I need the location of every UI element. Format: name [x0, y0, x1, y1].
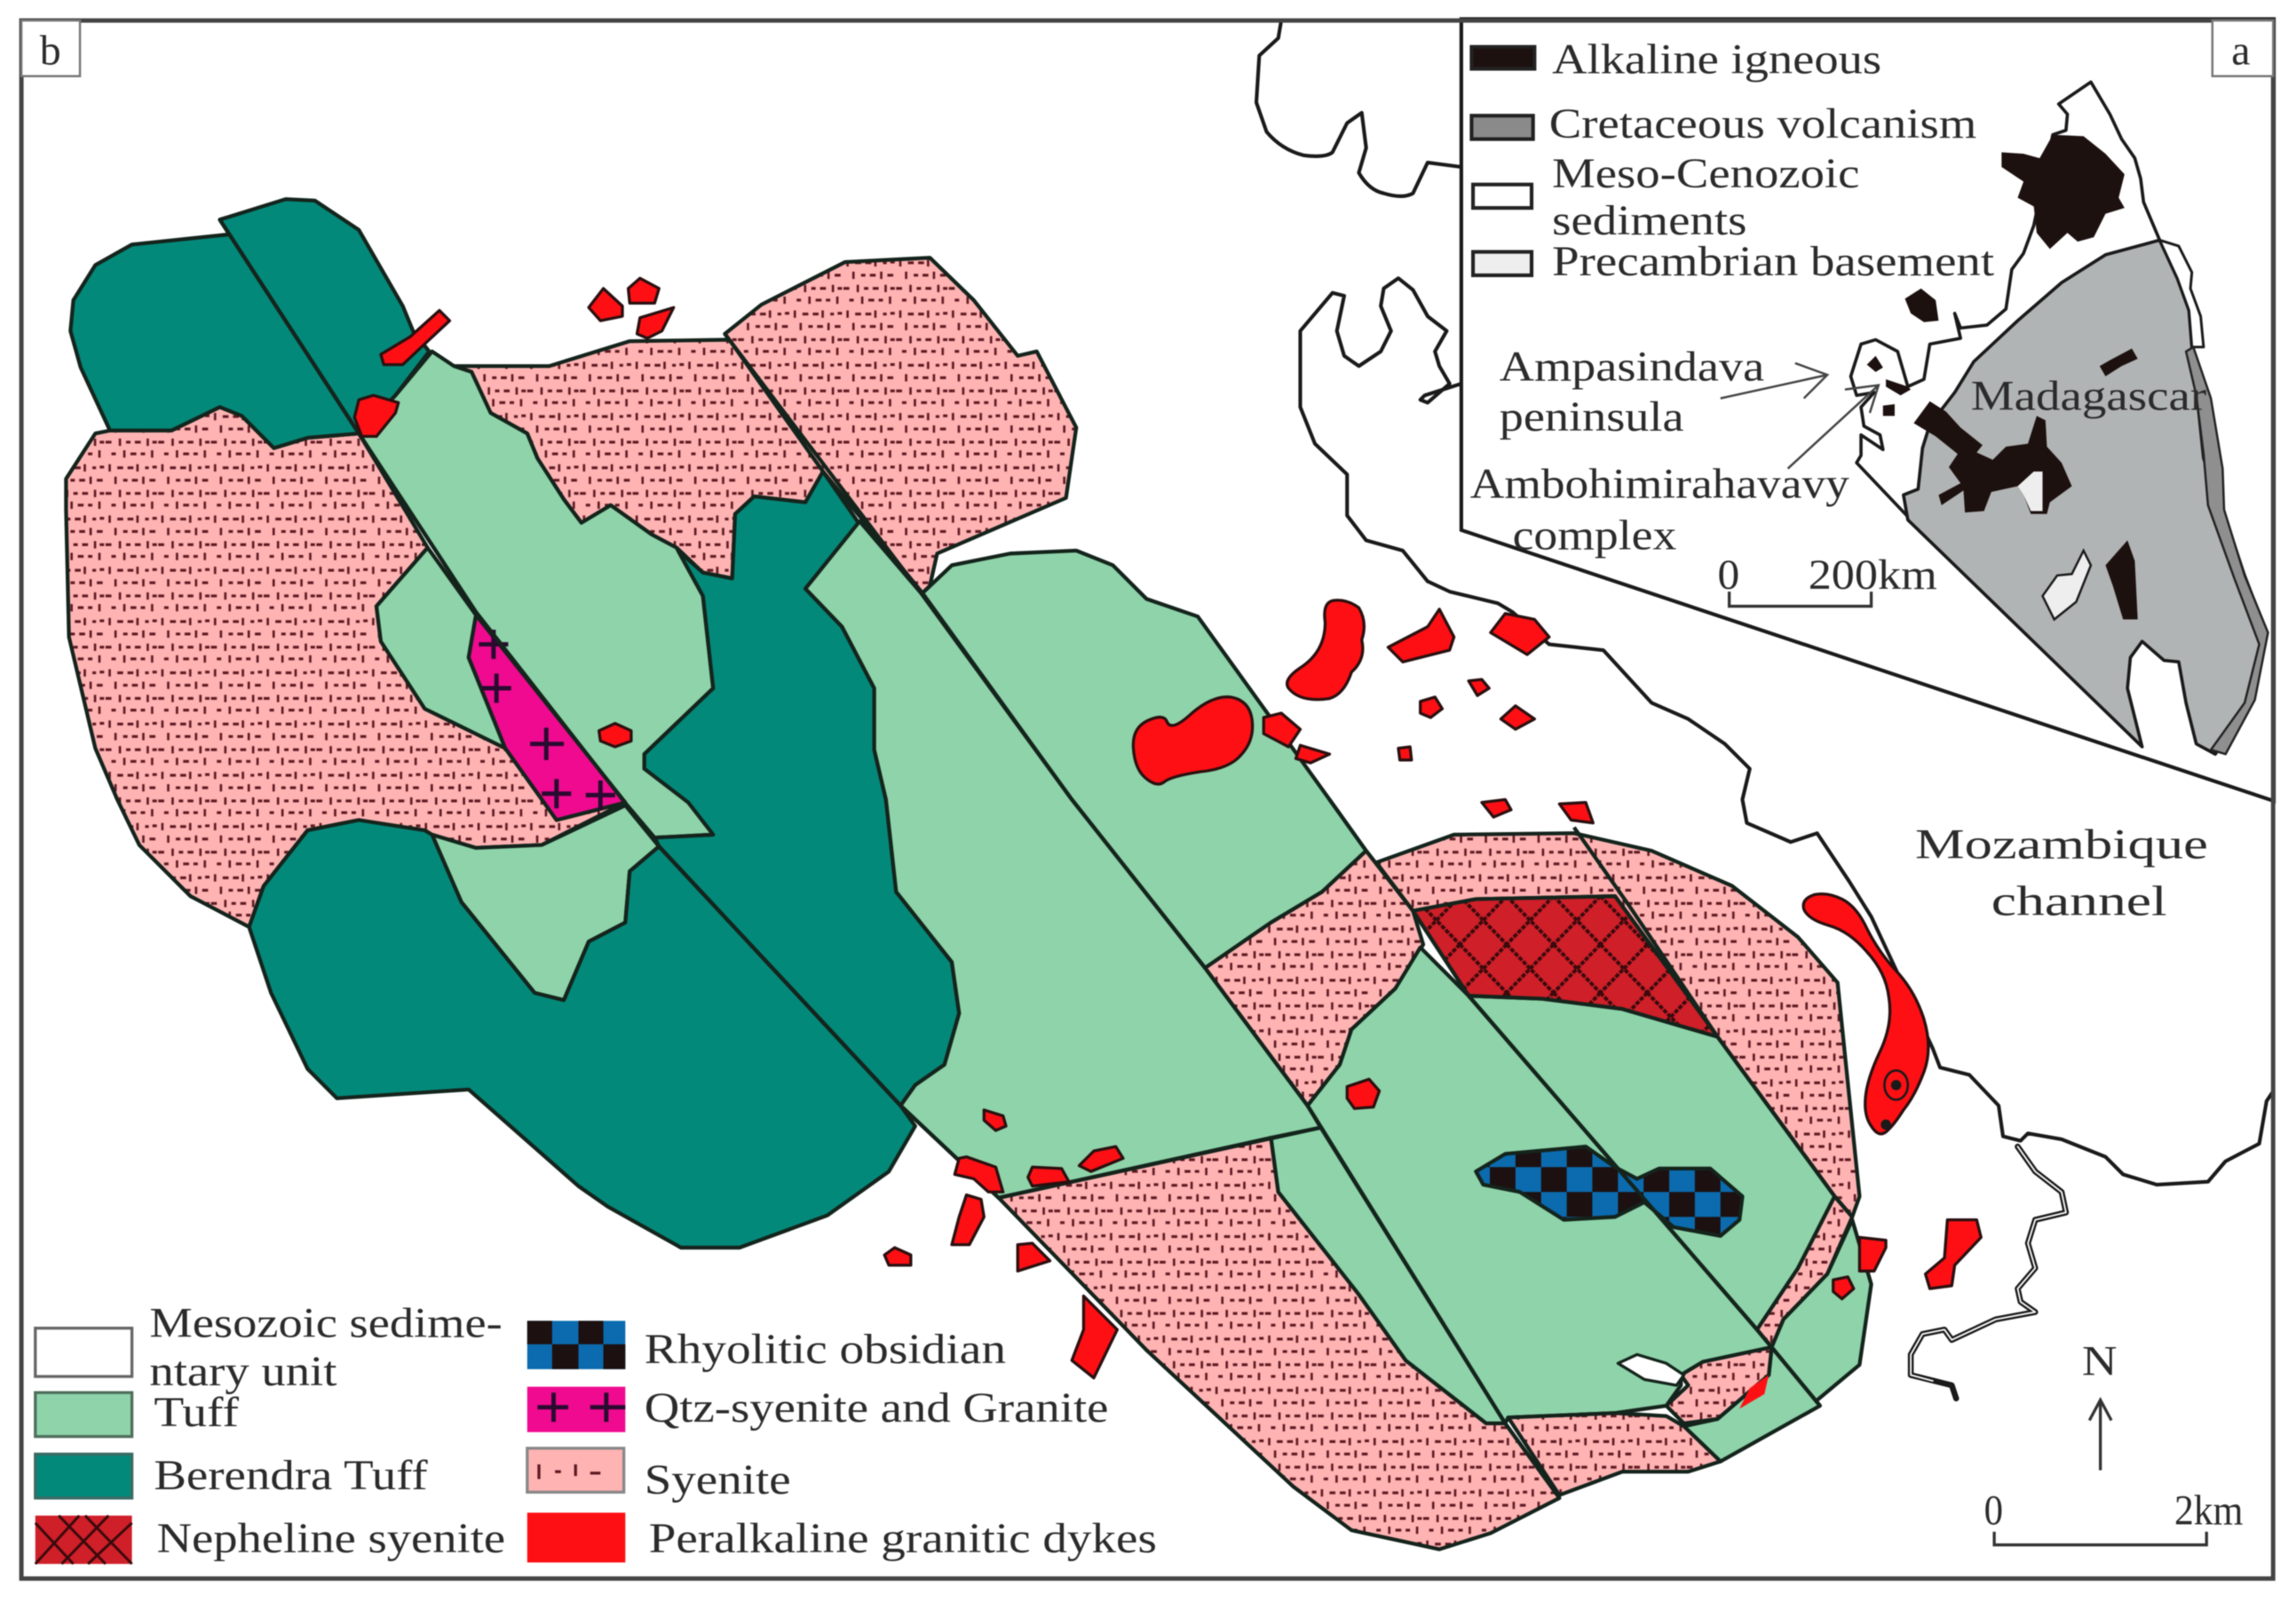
Berendra tuff: central body	[645, 472, 959, 1106]
Qtz-syenite and granite	[469, 615, 625, 820]
syenite: small south body	[1667, 1347, 1771, 1424]
inset legend swatches	[1471, 47, 1534, 275]
tuff: western lobe	[376, 548, 505, 749]
map scale bar: 0	[1984, 1487, 2003, 1535]
syenite: north-east block	[724, 258, 1076, 593]
place labels: Ampasindava	[1500, 344, 1764, 391]
swatch: Mesozoic sedimentary unit	[36, 1328, 132, 1376]
inset scale bar: 0	[1717, 551, 1739, 599]
tuff: south-east block	[1771, 1220, 1872, 1401]
legend: left column: ntary unit	[149, 1348, 336, 1395]
tuff: southern lobe	[432, 805, 659, 1000]
legend: left column: Tuff	[154, 1389, 239, 1436]
north arrow	[2082, 1337, 2118, 1471]
inset legend text: sediments	[1552, 197, 1746, 244]
coastline: main shore	[1300, 278, 2272, 1185]
tuff: central strip	[805, 521, 1321, 1198]
peralkaline granitic dykes	[354, 278, 1981, 1408]
tuff: southern sliver	[1271, 1128, 1505, 1424]
sample location marker	[1880, 1070, 1908, 1130]
swatch: Peralkaline granitic dykes	[527, 1512, 625, 1562]
fault lines	[220, 219, 1852, 1498]
north arrow: N	[2082, 1337, 2118, 1384]
tuff: north-east block	[922, 551, 1366, 968]
eastern coast sliver	[2159, 240, 2204, 347]
tuff: middle block	[1308, 948, 1771, 1424]
legend: left column: Berendra Tuff	[154, 1452, 428, 1499]
panel label b	[21, 20, 80, 76]
Berendra tuff: southern body	[249, 820, 915, 1248]
map scale bar: 2km	[2174, 1487, 2243, 1535]
legend: right column: Qtz-syenite and Granite	[645, 1384, 1108, 1431]
syenite: north-central body	[454, 340, 823, 578]
swatch: Tuff	[36, 1392, 132, 1437]
river estuary	[1911, 1146, 2066, 1399]
swatch: Qtz-syenite and Granite	[527, 1387, 625, 1432]
Madagascar north sediments outline	[1851, 82, 2159, 523]
inset legend text: Alkaline igneous	[1552, 36, 1881, 83]
swatch: Syenite	[527, 1448, 624, 1492]
inset legend text: Meso-Cenozoic	[1552, 150, 1859, 197]
inset panel a: Madagascar	[1461, 19, 2274, 801]
tuff: northern strip	[359, 352, 713, 837]
place labels: peninsula	[1500, 393, 1684, 440]
nepheline syenite	[1413, 896, 1717, 1036]
legend: right column: Peralkaline granitic dykes	[649, 1515, 1157, 1562]
Berendra tuff: north-west block	[70, 234, 359, 448]
inset legend text: Cretaceous volcanism	[1549, 100, 1976, 147]
panel label a	[2213, 20, 2273, 76]
arrows to peninsula and complex	[1721, 363, 1879, 469]
place labels	[1470, 344, 2206, 559]
map scale bar	[1984, 1487, 2243, 1545]
tuff: south tip	[1684, 1347, 1820, 1462]
panel label b: b	[40, 28, 61, 75]
sea label: Mozambique	[1915, 821, 2208, 868]
swatch: Rhyolitic obsidian	[527, 1320, 625, 1369]
coastline: northern shore	[1256, 20, 1461, 196]
legend: right column: Rhyolitic obsidian	[645, 1326, 1006, 1373]
Mesozoic sedimentary lens	[1618, 1354, 1684, 1385]
syenite: eastern strip	[1757, 1196, 1852, 1347]
syenite: southern block	[999, 1138, 1559, 1550]
syenite: western body	[66, 407, 625, 927]
legend: left column: Mesozoic sedime-	[149, 1300, 503, 1347]
syenite: south lobe	[1508, 1413, 1721, 1495]
legend: left column	[36, 1300, 505, 1564]
alkaline igneous bodies	[1867, 135, 2138, 620]
Cretaceous volcanism strip	[2186, 347, 2268, 754]
place labels: Madagascar	[1971, 373, 2206, 420]
inset scale bar: 200km	[1809, 551, 1937, 599]
syenite: eastern ring	[1376, 833, 1859, 1217]
legend: left column: Nepheline syenite	[157, 1515, 505, 1562]
legend: right column	[527, 1320, 1157, 1562]
swatch: Nepheline syenite	[36, 1516, 132, 1564]
rhyolitic obsidian	[1476, 1146, 1742, 1236]
Precambrian basement outcrops	[2018, 472, 2043, 511]
swatch: Berendra Tuff	[36, 1454, 132, 1498]
Madagascar Precambrian basement	[1904, 240, 2267, 754]
place labels: Ambohimirahavavy	[1470, 461, 1849, 508]
syenite: central wedge	[1205, 851, 1423, 1106]
inset scale bar	[1717, 551, 1937, 607]
inset legend text: Precambrian basement	[1552, 238, 1994, 285]
main geological map panel b	[66, 199, 1981, 1550]
Berendra tuff: north sliver	[220, 199, 429, 433]
legend: right column: Syenite	[645, 1456, 791, 1503]
sea label	[1915, 821, 2208, 925]
panel label a: a	[2231, 28, 2250, 75]
tuff: eastern block	[1469, 995, 1834, 1329]
inset legend text	[1549, 36, 1994, 285]
sea label: channel	[1991, 878, 2167, 925]
place labels: complex	[1513, 512, 1676, 559]
